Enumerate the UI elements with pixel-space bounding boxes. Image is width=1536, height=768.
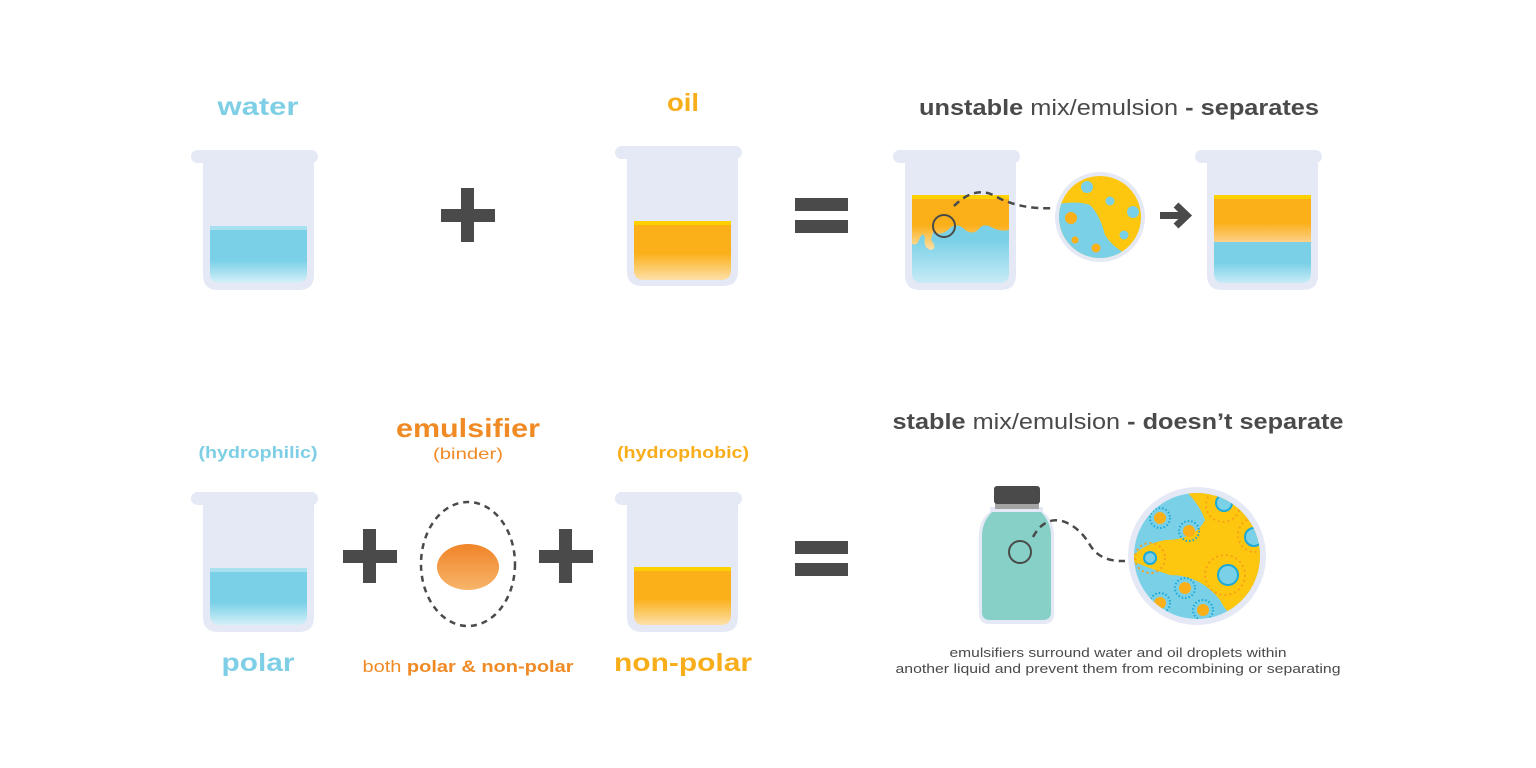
magnified circle: unstable [1055, 172, 1145, 265]
label: non-polar: non-polar [614, 649, 752, 677]
title: stable: stable mix/emulsion - doesn’t separate [892, 409, 1344, 434]
title: water: water [216, 93, 299, 121]
beaker: oil [615, 146, 742, 286]
plus sign [539, 529, 593, 583]
arrow [1160, 205, 1187, 226]
beaker: water [191, 150, 318, 290]
equals sign [795, 541, 848, 576]
magnified circle: stable [1128, 487, 1272, 625]
label: hydrophobic: (hydrophobic) [617, 443, 749, 462]
title: emulsifier: emulsifier [396, 413, 540, 443]
label: polar: polar [222, 649, 295, 677]
beaker: polar [191, 492, 318, 632]
label: hydrophilic: (hydrophilic) [198, 443, 318, 462]
title: unstable: unstable mix/emulsion - separates [919, 95, 1319, 120]
icon: bottle [979, 486, 1054, 624]
beaker: separated [1195, 150, 1322, 290]
label: binder: (binder) [433, 446, 503, 463]
plus sign [441, 188, 495, 242]
caption: another liquid and prevent them from recombining or separating [896, 661, 1340, 676]
dashed connector [954, 192, 1055, 208]
caption [896, 645, 1340, 676]
label: both polar & non-polar: both polar & non-polar [362, 657, 574, 676]
caption: emulsifiers surround water and oil droplets within [950, 645, 1286, 660]
plus sign [343, 529, 397, 583]
icon: egg [421, 502, 515, 626]
title: oil: oil [667, 89, 699, 117]
beaker: non-polar [615, 492, 742, 632]
equals sign [795, 198, 848, 233]
dashed connector [1033, 520, 1125, 561]
beaker: unstable mix [893, 150, 1020, 290]
